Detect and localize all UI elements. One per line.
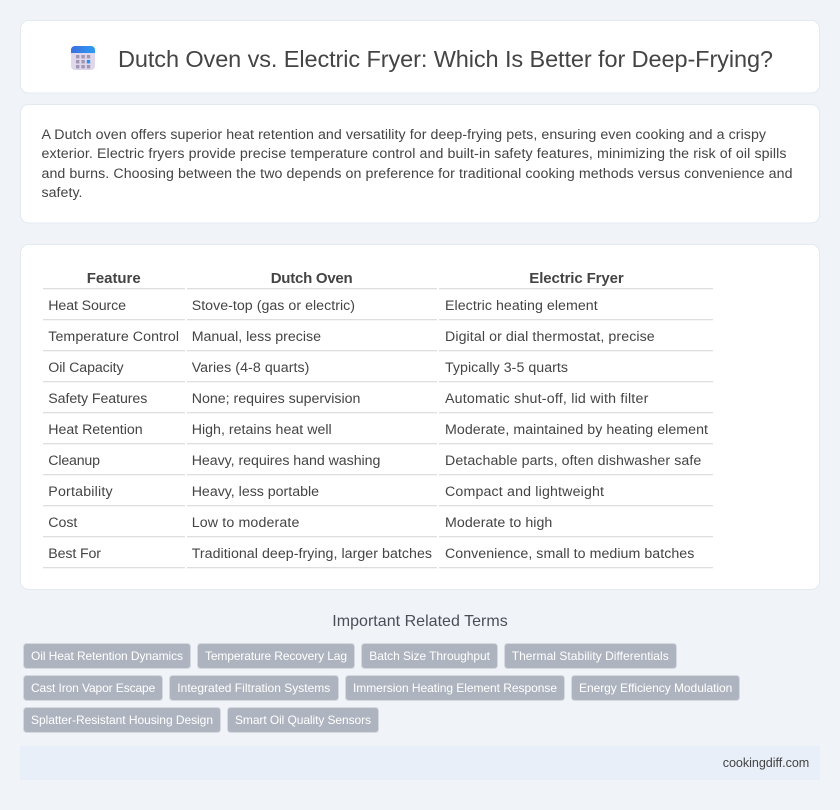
table row: Oil Capacity (48, 360, 568, 376)
tag: Smart Oil Quality Sensors: Smart Oil Quality Sensors (235, 713, 371, 727)
table row: Cost: Moderate to high (445, 515, 552, 531)
table header row: Electric Fryer (529, 270, 624, 287)
tag: Immersion Heating Element Response: Immersion Heating Element Response (353, 681, 557, 695)
footer source text: cookingdiff.com (723, 756, 809, 770)
table row: Cost: Low to moderate (192, 515, 300, 531)
tag: Smart Oil Quality Sensors (228, 708, 378, 732)
summary text: exterior. Electric fryers provide precise temperature control and built-in safety features, minimizing the risk of oil spills (42, 146, 786, 162)
tag: Immersion Heating Element Response (346, 676, 564, 700)
tag: Integrated Filtration Systems (170, 676, 338, 700)
table row: Temperature Control: Manual, less precise (192, 329, 321, 345)
table row: Safety Features: None; requires supervision (192, 391, 360, 407)
table row: Best For (48, 546, 694, 562)
tag: Oil Heat Retention Dynamics (24, 644, 190, 668)
table row: Portability (48, 484, 604, 500)
tag: Thermal Stability Differentials (504, 644, 676, 668)
table row: Cleanup: Heavy, requires hand washing (192, 453, 380, 469)
tag: Splatter-Resistant Housing Design (24, 708, 220, 732)
tag: Splatter-Resistant Housing Design: Splatter-Resistant Housing Design (31, 713, 213, 727)
summary text (42, 127, 792, 201)
table row: Safety Features: Automatic shut-off, lid with filter (445, 391, 649, 407)
table row: Cleanup (48, 453, 701, 469)
table row: Cleanup: Detachable parts, often dishwasher safe (445, 453, 701, 469)
table row: Cost (48, 515, 552, 531)
table row: Portability: Compact and lightweight (445, 484, 604, 500)
tag: Energy Efficiency Modulation: Energy Efficiency Modulation (579, 681, 732, 695)
tag: Temperature Recovery Lag: Temperature Recovery Lag (205, 649, 347, 663)
table header row: Dutch Oven (271, 270, 353, 287)
table row: Cost: Cost (48, 515, 77, 531)
table header row: Feature (87, 270, 141, 287)
table row: Cleanup: Cleanup (48, 453, 100, 469)
panel: comparison table (20, 244, 820, 590)
table row: Heat Source: Electric heating element (445, 298, 598, 314)
table row: Best For: Traditional deep-frying, larger batches (192, 546, 432, 562)
summary text: safety. (42, 185, 82, 201)
table header row (87, 270, 624, 287)
title: Dutch Oven vs. Electric Fryer: Which Is Better for Deep-Frying? (118, 46, 773, 72)
table row: Temperature Control: Temperature Control (48, 329, 179, 345)
tag: Batch Size Throughput (362, 644, 498, 668)
table row: Oil Capacity: Typically 3-5 quarts (445, 360, 568, 376)
table row: Heat Source (48, 298, 598, 314)
tag: Cast Iron Vapor Escape: Cast Iron Vapor Escape (31, 681, 156, 695)
table row: Portability: Heavy, less portable (192, 484, 319, 500)
panel: title header (20, 20, 820, 93)
heading: important related terms: Important Related Terms (332, 613, 508, 630)
table row: Best For: Convenience, small to medium batches (445, 546, 694, 562)
tag: Thermal Stability Differentials: Thermal Stability Differentials (512, 649, 669, 663)
panel: related term tags (24, 644, 740, 732)
panel: summary (20, 104, 820, 223)
table row: Safety Features (48, 391, 649, 407)
table row: Oil Capacity: Varies (4-8 quarts) (192, 360, 309, 376)
table row: Safety Features: Safety Features (48, 391, 147, 407)
table row: Heat Source: Stove-top (gas or electric) (192, 298, 355, 314)
table row: Temperature Control: Digital or dial thermostat, precise (445, 329, 655, 345)
summary text: and burns. Choosing between the two depends on preference for traditional cooking methods versus convenience and (42, 166, 792, 182)
summary text: A Dutch oven offers superior heat retention and versatility for deep-frying pets, ensuring even cooking and a crispy (42, 127, 767, 143)
table row: Heat Retention: Heat Retention (48, 422, 143, 438)
table row: Oil Capacity: Oil Capacity (48, 360, 125, 376)
icon: calendar (71, 46, 95, 70)
table row: Heat Retention (48, 422, 708, 438)
tag: Cast Iron Vapor Escape (24, 676, 162, 700)
table row: Temperature Control (48, 329, 655, 345)
table row: Portability: Portability (48, 484, 114, 500)
table row: Heat Retention: High, retains heat well (192, 422, 332, 438)
tag: Oil Heat Retention Dynamics: Oil Heat Retention Dynamics (31, 649, 183, 663)
tag: Energy Efficiency Modulation (572, 676, 740, 700)
table row: Heat Source: Heat Source (48, 298, 126, 314)
tag: Temperature Recovery Lag (198, 644, 354, 668)
table row: Heat Retention: Moderate, maintained by heating element (445, 422, 708, 438)
footer bar (20, 746, 820, 780)
table row: Best For: Best For (48, 546, 101, 562)
tag: Batch Size Throughput: Batch Size Throughput (369, 649, 491, 663)
tag: Integrated Filtration Systems: Integrated Filtration Systems (177, 681, 330, 695)
